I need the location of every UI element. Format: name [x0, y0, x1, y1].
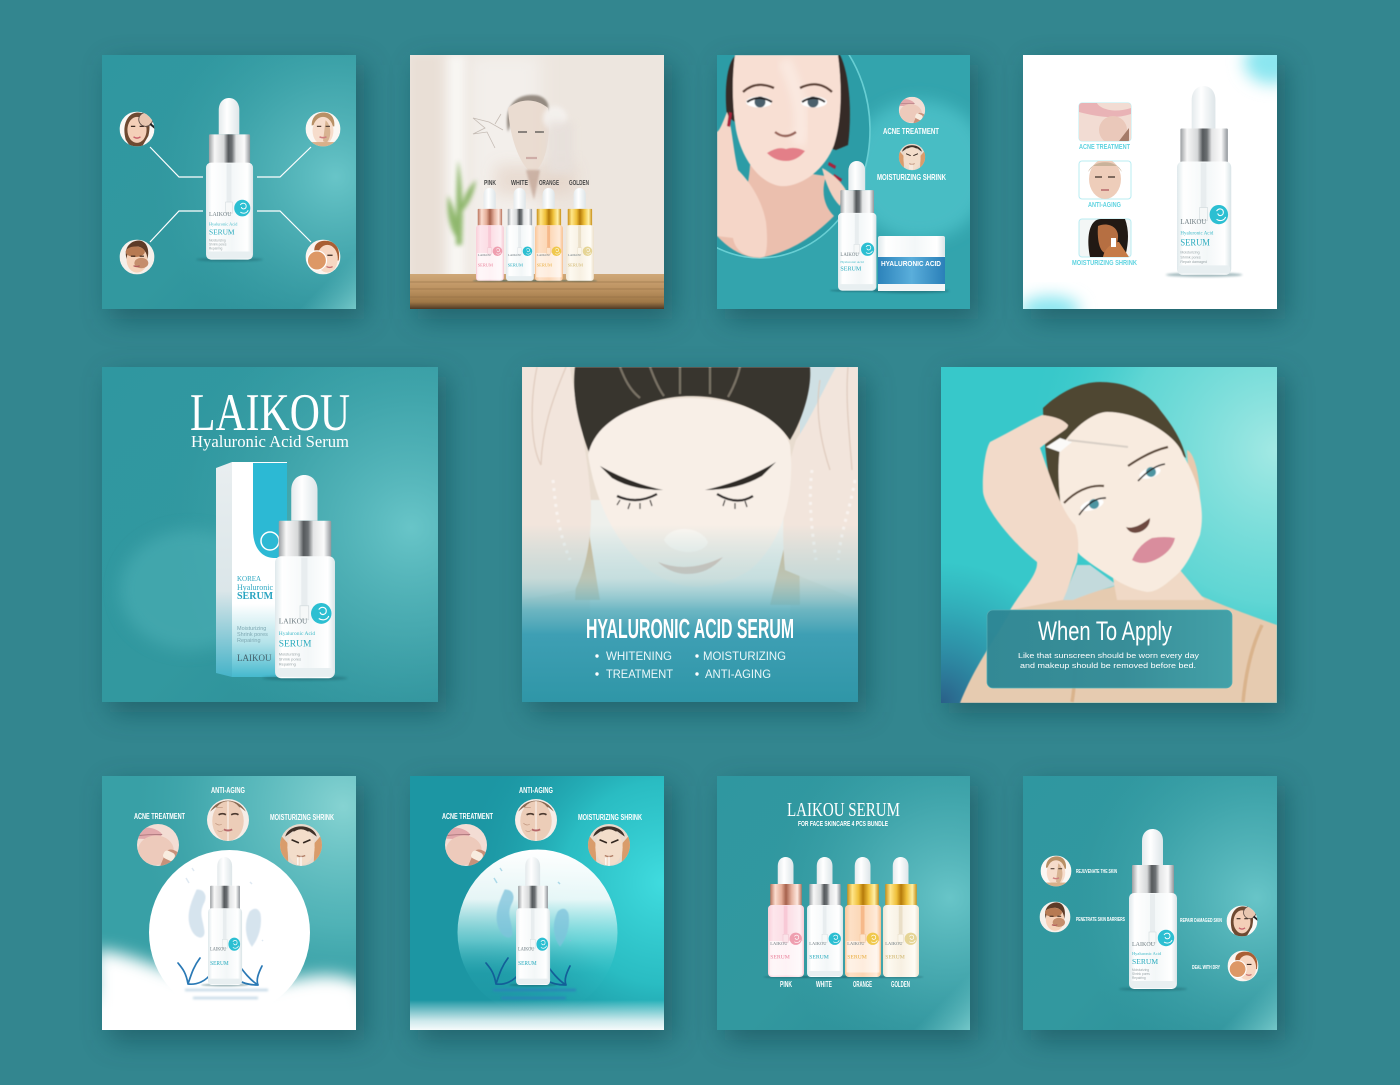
variant labels	[484, 180, 589, 187]
variant labels: WHITE	[511, 180, 528, 187]
bottle: orange	[532, 188, 566, 282]
bottle: LAIKOU	[840, 253, 859, 258]
bottle: SERUM	[518, 961, 537, 967]
variant labels: WHITE	[816, 980, 832, 989]
icon: anti-aging	[515, 799, 557, 841]
icon: rejuvenate	[1041, 856, 1071, 887]
bottle: Repairing	[279, 661, 296, 667]
bottle: Moisturizing	[279, 651, 300, 656]
label: penetrate: PENETRATE SKIN BARRIERS	[1076, 917, 1125, 923]
bottle: pink	[473, 188, 507, 282]
benefits list: TREATMENT	[606, 669, 673, 681]
benefits list: WHITENING	[606, 651, 672, 663]
icon: penetrate	[1040, 902, 1070, 932]
icon: acne treatment	[137, 824, 179, 866]
bottle: SERUM	[840, 266, 862, 272]
model portrait	[717, 55, 850, 258]
bottle: Shrink pores	[1180, 255, 1201, 259]
panel: serum benefits diagram	[102, 55, 364, 319]
label: acne treatment: ACNE TREATMENT	[442, 812, 493, 821]
icon: acne treatment	[899, 97, 925, 123]
panel: skin benefits callouts	[1023, 776, 1285, 1040]
product box: KOREA	[237, 575, 261, 583]
benefits list: MOISTURIZING	[703, 651, 786, 663]
bottle: Hyaluronic Acid	[1132, 951, 1162, 956]
bottle: Hyaluronic Acid	[279, 631, 315, 637]
bottle: pink	[764, 857, 808, 978]
title: LAIKOU SERUM	[787, 799, 900, 821]
bottle: LAIKOU	[209, 212, 232, 218]
product box: Shrink pores	[237, 632, 268, 638]
bottle: pink: LAIKOU	[770, 941, 788, 946]
panel: four piece bundle	[717, 776, 978, 1040]
description: and makeup should be removed before bed.	[1020, 661, 1196, 670]
bottle: SERUM	[209, 227, 235, 236]
panel: when to apply card	[941, 367, 1285, 713]
description: Like that sunscreen should be worn every day	[1018, 651, 1199, 660]
description	[1018, 651, 1199, 670]
bottle: pink: SERUM	[478, 262, 493, 267]
bottle: LAIKOU	[518, 946, 535, 952]
label: anti-aging: ANTI-AGING	[519, 786, 553, 795]
variant labels	[780, 980, 910, 989]
ring backdrop	[650, 2, 870, 258]
heading: When To Apply	[1038, 616, 1172, 646]
bottle: orange: SERUM	[847, 954, 867, 960]
bottle	[201, 857, 249, 986]
bottle	[262, 475, 348, 680]
connector lines	[150, 147, 311, 242]
label: anti-aging: ANTI-AGING	[211, 786, 245, 795]
bottle	[509, 857, 557, 986]
variant labels: PINK	[484, 180, 496, 187]
bottle: Moisturizing	[209, 238, 226, 242]
photo: acne treatment	[1079, 103, 1131, 144]
bottle: golden: LAIKOU	[885, 941, 903, 946]
bottle	[1119, 829, 1187, 991]
info panel	[987, 610, 1232, 688]
plant	[447, 160, 476, 245]
bottle: Shrink pores	[279, 656, 301, 661]
panel: LAIKOU hero card	[102, 367, 446, 712]
icon: pale face	[306, 112, 340, 147]
panel: white benefits card	[1020, 40, 1300, 324]
label: dry skin: DEAL WITH DRY	[1192, 965, 1220, 971]
icon: face with magnifier lens	[306, 240, 340, 274]
water splash	[486, 868, 576, 998]
bottle	[830, 161, 884, 292]
bottle: Repairing	[1132, 976, 1146, 980]
product box: Hyaluronic	[237, 583, 273, 592]
bottle: SERUM	[1132, 957, 1158, 966]
product box: SERUM	[237, 591, 274, 602]
icon: dry skin	[1228, 951, 1258, 981]
label: moisturizing shrink: MOISTURIZING SHRINK	[1072, 260, 1137, 267]
bottle: white: LAIKOU	[508, 253, 522, 257]
bottle: Hyaluronic Acid	[209, 221, 238, 226]
label: rejuvenate: REJUVENATE THE SKIN	[1076, 869, 1117, 875]
panel: water splash on white circle	[95, 776, 365, 1040]
bottle: white: SERUM	[508, 262, 523, 267]
bottle: white: LAIKOU	[809, 941, 827, 946]
bottle: golden	[563, 188, 597, 282]
bottle: SERUM	[279, 638, 312, 649]
bottle: Hyaluronic Acid	[840, 260, 864, 264]
white circle	[149, 850, 310, 1015]
bottle: orange: LAIKOU	[537, 253, 551, 257]
variant labels: GOLDEN	[569, 180, 589, 187]
title: LAIKOU	[190, 384, 350, 442]
label: anti-aging: ANTI-AGING	[1088, 202, 1121, 209]
bottle: golden: SERUM	[885, 954, 905, 960]
photo: moisturizing shrink	[1079, 219, 1131, 257]
bottle: Repair damaged	[1180, 260, 1207, 264]
bottle: LAIKOU	[1132, 942, 1156, 948]
panel: face wash hero card	[522, 367, 866, 712]
bottle: orange: SERUM	[537, 262, 552, 267]
label: acne treatment: ACNE TREATMENT	[883, 126, 940, 136]
icon: moisturizing	[588, 824, 630, 866]
label: acne treatment: ACNE TREATMENT	[1079, 144, 1131, 151]
benefits list: ANTI-AGING	[705, 669, 771, 681]
icon: face with dark patches	[120, 240, 154, 274]
icon: moisturizing	[899, 144, 925, 170]
label: moisturizing shrink: MOISTURIZING SHRINK	[270, 813, 334, 822]
bottle: LAIKOU	[210, 946, 227, 952]
icon: repair	[1227, 906, 1258, 936]
benefits list	[595, 651, 786, 681]
subtitle: Hyaluronic Acid Serum	[191, 432, 349, 451]
subtitle: FOR FACE SKINCARE 4 PCS BUNDLE	[798, 819, 888, 828]
bottle: white: SERUM	[809, 954, 829, 960]
variant labels: PINK	[780, 980, 792, 989]
bottle: golden	[878, 857, 924, 978]
panel: four serum variants on wooden table	[410, 55, 672, 319]
bottle	[196, 98, 263, 261]
panel: portrait with serum and cream jar	[715, 54, 988, 330]
bottle	[1166, 86, 1243, 277]
water splash	[178, 868, 268, 998]
panel: water splash on teal glow	[410, 776, 672, 1040]
product box: LAIKOU	[237, 653, 272, 663]
bottle: golden: SERUM	[568, 262, 583, 267]
bottle: golden: LAIKOU	[568, 253, 582, 257]
bottle: orange	[840, 857, 886, 978]
label: moisturizing shrink: MOISTURIZING SHRINK	[877, 172, 947, 182]
bottle: LAIKOU	[279, 617, 308, 626]
model applying serum	[960, 382, 1277, 703]
label: acne treatment: ACNE TREATMENT	[134, 812, 185, 821]
white mist	[410, 1000, 664, 1030]
cream jar: HYALURONIC ACID	[881, 261, 941, 268]
variant labels: GOLDEN	[891, 980, 910, 989]
bottle: white	[800, 857, 850, 978]
product box: Moisturizing	[237, 626, 266, 632]
bottle: SERUM	[1180, 237, 1210, 247]
bottle: Repairing	[209, 246, 223, 251]
variant labels: ORANGE	[853, 980, 872, 989]
bottle: Hyaluronic Acid	[1180, 231, 1214, 237]
glowing arch	[458, 850, 618, 1016]
variant labels: ORANGE	[539, 180, 559, 187]
bottle: orange: LAIKOU	[847, 941, 865, 946]
bottle: white	[500, 188, 540, 282]
bottle: pink: LAIKOU	[478, 253, 492, 257]
bottle: Shrink pores	[1132, 972, 1150, 976]
table	[410, 274, 664, 309]
icon: anti-aging	[207, 799, 249, 841]
bottle: pink: SERUM	[770, 954, 790, 960]
bottle: Shrink pores	[209, 242, 227, 246]
product box	[216, 462, 287, 677]
icon: face with magnifier	[120, 112, 155, 146]
faded model portrait with shatter effect	[473, 95, 575, 200]
bottle: Moisturizing	[1132, 968, 1149, 972]
white mist	[95, 950, 365, 1040]
bottle: Moisturizing	[1180, 250, 1200, 255]
model washing face	[522, 367, 858, 620]
photo: anti-aging	[1079, 159, 1131, 199]
icon: moisturizing	[280, 824, 322, 866]
icon: acne treatment	[445, 824, 487, 866]
label: repair: REPAIR DAMAGED SKIN	[1180, 918, 1222, 924]
teal fade	[522, 525, 858, 702]
bottle: LAIKOU	[1180, 219, 1206, 226]
bottle: SERUM	[210, 961, 229, 967]
product box: Repairing	[237, 638, 261, 644]
cream jar	[873, 236, 949, 293]
